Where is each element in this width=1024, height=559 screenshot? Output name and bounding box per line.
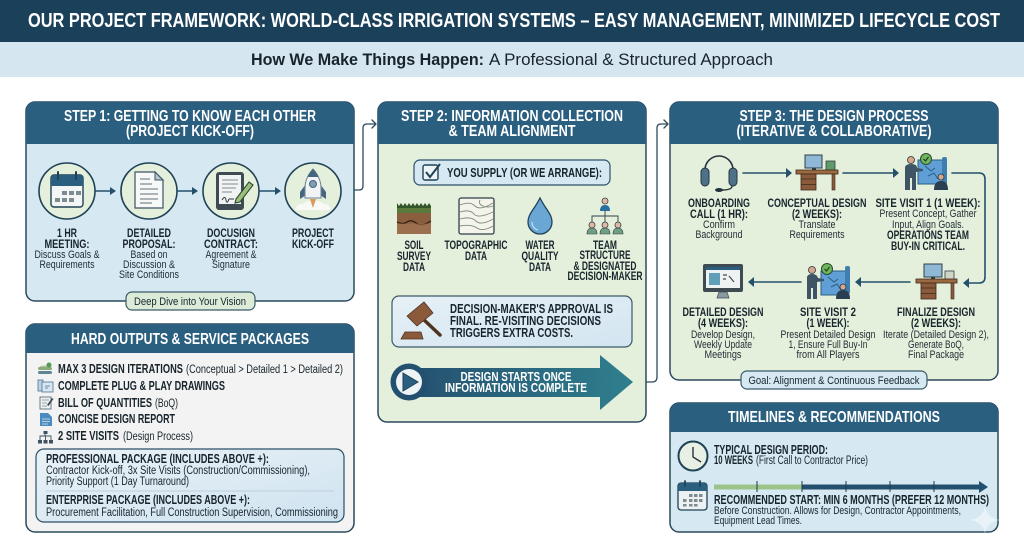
label: 1 hr meeting: MEETING: [44, 239, 90, 251]
label: project kick-off: KICK-OFF [292, 239, 334, 251]
icon: finalize desk [916, 264, 957, 299]
label: soil survey data: DATA [403, 262, 425, 274]
icon: gavel [401, 302, 440, 339]
icon: desk with monitor [796, 155, 838, 190]
recommended start: Equipment Lead Times. [714, 515, 802, 527]
label: team structure: TEAM [593, 240, 617, 252]
panel: step 3 [670, 102, 998, 389]
watermark sparkle [970, 506, 1000, 534]
label: finalize design: (2 WEEKS): [911, 318, 961, 330]
label: detailed proposal: DETAILED [127, 228, 171, 240]
label: site visit 2: from All Players [796, 349, 860, 361]
label: detailed proposal: Based on [130, 249, 168, 261]
arrow: step 1 to step 2 [354, 120, 376, 190]
label: detailed design [682, 307, 764, 361]
output: design report: CONCISE DESIGN REPORT [58, 412, 175, 426]
icon: calendar [678, 481, 707, 510]
decision callout [392, 296, 632, 347]
icon: tablet contract [203, 163, 259, 219]
typical design period: TYPICAL DESIGN PERIOD: [714, 443, 828, 457]
icon: site visits [38, 431, 53, 444]
label: onboarding call: Confirm [703, 219, 735, 231]
output: site visits: 2 SITE VISITS [58, 429, 119, 443]
output: site visits [58, 429, 193, 443]
label: water quality data: DATA [529, 262, 551, 274]
arrow [743, 168, 792, 178]
label: water quality data: WATER [526, 240, 555, 252]
label: conceptual design: Translate [798, 219, 836, 231]
callout: deep dive [126, 292, 255, 310]
label: detailed proposal: Site Conditions [119, 269, 179, 281]
output: bill of quantities: (BoQ) [155, 398, 178, 410]
label: project kick-off: PROJECT [292, 228, 334, 240]
callout: goal [741, 371, 927, 389]
timelines heading: TIMELINES & RECOMMENDATIONS [728, 409, 940, 426]
label: site visit 2: (1 WEEK): [806, 318, 850, 330]
label: docusign contract: CONTRACT: [204, 239, 258, 251]
arrow: design starts [390, 355, 633, 410]
label: soil survey data [397, 240, 431, 274]
step 1 heading: STEP 1: GETTING TO KNOW EACH OTHER [64, 108, 316, 125]
label: site visit 1: Input, Align Goals. [892, 219, 964, 231]
label: finalize design: FINALIZE DESIGN [897, 307, 975, 319]
label: docusign contract: Agreement & [206, 249, 257, 261]
icon: water drop [528, 198, 552, 234]
decision callout: DECISION-MAKER'S APPROVAL IS [450, 301, 613, 316]
subtitle band: How We Make Things Happen: [251, 51, 484, 69]
label: onboarding call [688, 198, 750, 241]
panel: timelines [670, 403, 998, 532]
icon: iterations [38, 362, 52, 374]
output: drawings: COMPLETE PLUG & PLAY DRAWINGS [58, 379, 225, 393]
icon: clock [678, 442, 708, 470]
label: conceptual design: (2 WEEKS): [792, 209, 842, 221]
title banner [0, 0, 1024, 42]
callout: deep dive: Deep Dive into Your Vision [134, 296, 246, 308]
label: site visit 2: Present Detailed Design [780, 329, 876, 341]
output: site visits: (Design Process) [123, 431, 193, 443]
you supply pill [414, 160, 610, 185]
arrow: design starts: INFORMATION IS COMPLETE [445, 380, 587, 395]
arrow [855, 277, 910, 287]
label: site visit 1: SITE VISIT 1 (1 WEEK): [876, 198, 980, 210]
label: detailed design: Meetings [704, 349, 742, 361]
arrow: step 2 to step 3 [633, 120, 668, 382]
label: site visit 1: BUY-IN CRITICAL. [891, 241, 965, 253]
step 2 heading: & TEAM ALIGNMENT [448, 123, 576, 140]
label: finalize design: Final Package [908, 349, 964, 361]
label: conceptual design: CONCEPTUAL DESIGN [768, 198, 866, 210]
step 2 heading [401, 108, 623, 140]
enterprise package: ENTERPRISE PACKAGE (INCLUDES ABOVE +): [46, 493, 250, 507]
label: project kick-off [292, 228, 334, 251]
label: detailed proposal: PROPOSAL: [122, 239, 176, 251]
panel: hard outputs [26, 324, 354, 532]
panel: step 1 [26, 102, 354, 310]
label: site visit 2 [780, 307, 876, 361]
label: team structure: & DESIGNATED [574, 261, 636, 273]
label: detailed design: (4 WEEKS): [698, 318, 748, 330]
label: onboarding call: CALL (1 HR): [690, 209, 748, 221]
recommended start [714, 493, 989, 527]
label: conceptual design: Requirements [790, 229, 845, 241]
professional package [46, 452, 310, 488]
step 1 heading: (PROJECT KICK-OFF) [126, 123, 254, 140]
icon: team structure [587, 198, 623, 234]
arrow: design starts: DESIGN STARTS ONCE [460, 369, 572, 384]
professional package: PROFESSIONAL PACKAGE (INCLUDES ABOVE +): [46, 452, 269, 466]
label: onboarding call: Background [696, 229, 742, 241]
label: docusign contract [204, 228, 258, 271]
icon: soil [397, 203, 431, 234]
arrow [260, 187, 281, 195]
step 3 heading: STEP 3: THE DESIGN PROCESS [740, 108, 929, 125]
icon: report [40, 413, 52, 426]
step 3 heading [736, 108, 932, 140]
decision callout: TRIGGERS EXTRA COSTS. [450, 325, 573, 340]
panel: step 2 [378, 102, 646, 422]
icon: bill of quantities [40, 397, 54, 409]
icon: rocket [285, 163, 341, 219]
label: 1 hr meeting: Discuss Goals & [34, 249, 100, 261]
professional package: Contractor Kick-off, 3x Site Visits (Construction/Commissioning), [46, 465, 310, 477]
label: water quality data: QUALITY [522, 251, 559, 263]
typical design period: 10 WEEKS [714, 455, 753, 467]
label: team structure [568, 240, 643, 283]
label: detailed design: DETAILED DESIGN [682, 307, 764, 319]
you supply pill: YOU SUPPLY (OR WE ARRANGE): [447, 165, 602, 180]
typical design period: (First Call to Contractor Price) [756, 455, 868, 467]
icon: headset [701, 156, 737, 192]
recommended start: Before Construction. Allows for Design, Contractor Appointments, [714, 505, 961, 517]
typical design period [714, 443, 868, 467]
icon: drawings [38, 380, 53, 392]
arrow [96, 187, 116, 195]
professional package: Priority Support (1 Day Turnaround) [46, 476, 189, 488]
label: finalize design [883, 307, 989, 361]
enterprise package [46, 493, 338, 519]
label: detailed proposal [119, 228, 179, 281]
subtitle band: A Professional & Structured Approach [489, 51, 773, 69]
arrow [178, 187, 198, 195]
label: soil survey data: SOIL [404, 240, 424, 252]
label: topographic data: TOPOGRAPHIC [444, 240, 508, 252]
step 2 heading: STEP 2: INFORMATION COLLECTION [401, 108, 623, 125]
label: finalize design: Generate BoQ, [908, 339, 964, 351]
callout: goal: Goal: Alignment & Continuous Feedback [748, 375, 920, 387]
label: water quality data [522, 240, 559, 274]
arrow: down to second row [952, 173, 985, 288]
label: team structure: DECISION-MAKER [568, 271, 643, 283]
label: detailed design: Develop Design, [691, 329, 755, 341]
label: site visit 2: SITE VISIT 2 [800, 307, 856, 319]
icon: topographic map [459, 198, 494, 234]
icon: site visit 2 [807, 264, 850, 299]
label: 1 hr meeting [34, 228, 100, 271]
label: detailed design: Weekly Update [694, 339, 752, 351]
decision callout: FINAL. RE-VISITING DECISIONS [450, 313, 601, 328]
label: team structure: STRUCTURE [580, 250, 631, 262]
timeline bar [714, 481, 988, 493]
icon: document [121, 163, 177, 219]
arrow [843, 168, 899, 178]
label: topographic data [444, 240, 508, 263]
label: soil survey data: SURVEY [397, 251, 431, 263]
label: finalize design: Iterate (Detailed Design 2), [883, 329, 989, 341]
icon: site visit 1 [905, 154, 948, 190]
label: site visit 1: OPERATIONS TEAM [887, 230, 969, 242]
step 3 heading: (ITERATIVE & COLLABORATIVE) [736, 123, 932, 140]
icon: calendar [39, 163, 95, 219]
enterprise package: Procurement Facilitation, Full Construction Supervision, Commissioning [46, 507, 338, 519]
label: 1 hr meeting: 1 HR [57, 228, 78, 240]
label: conceptual design [768, 198, 866, 241]
icon: monitor [703, 264, 743, 298]
label: site visit 1: Present Concept, Gather [880, 208, 977, 220]
output: design iterations: MAX 3 DESIGN ITERATIONS [58, 362, 183, 376]
subtitle band [0, 42, 1024, 77]
label: detailed proposal: Discussion & [123, 259, 176, 271]
service packages box [36, 449, 344, 522]
label: docusign contract: DOCUSIGN [207, 228, 255, 240]
label: docusign contract: Signature [212, 259, 250, 271]
label: 1 hr meeting: Requirements [40, 259, 95, 271]
output: design iterations: (Conceptual > Detailed 1 > Detailed 2) [186, 364, 343, 376]
output: bill of quantities: BILL OF QUANTITIES [58, 396, 152, 410]
step 1 heading [64, 108, 316, 140]
label: topographic data: DATA [465, 251, 487, 263]
arrow [748, 277, 801, 287]
label: onboarding call: ONBOARDING [688, 198, 750, 210]
hard outputs heading: HARD OUTPUTS & SERVICE PACKAGES [71, 331, 309, 348]
label: site visit 1 [876, 198, 980, 253]
label: site visit 2: 1, Ensure Full Buy-In [788, 339, 868, 351]
output: design iterations [58, 362, 343, 376]
